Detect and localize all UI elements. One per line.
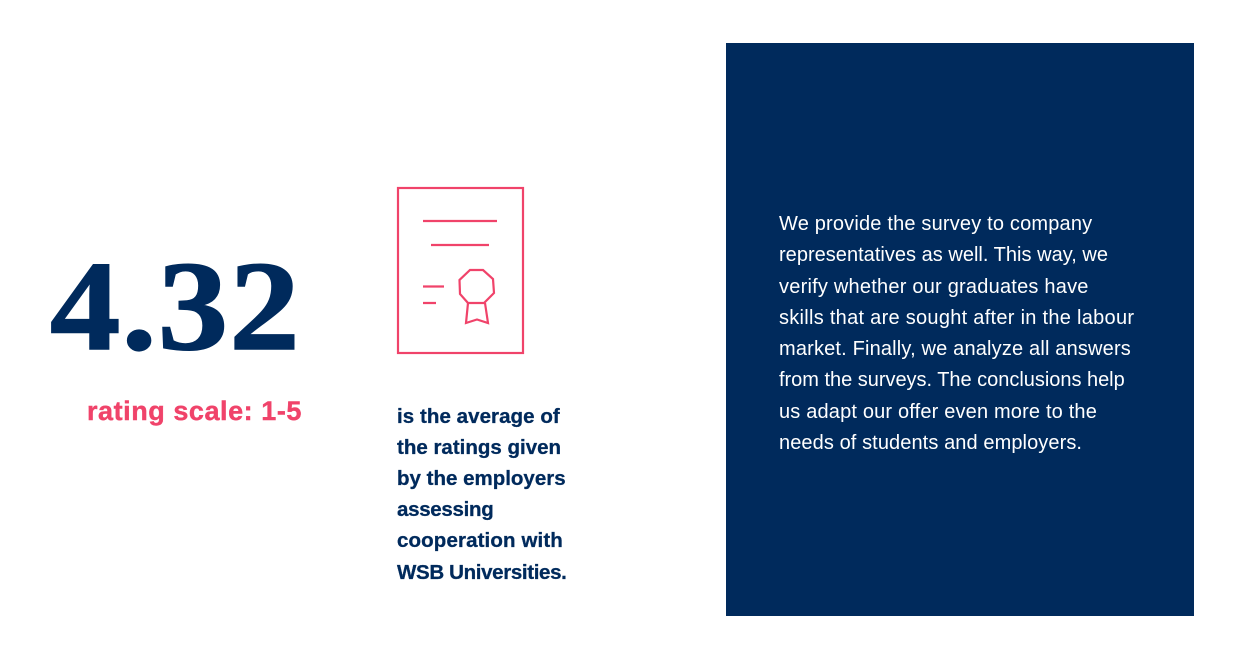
panel: survey explanation: [726, 43, 1194, 616]
panel body text: us adapt our offer even more to the: [779, 401, 1097, 423]
panel body text: representatives as well. This way, we: [779, 244, 1108, 266]
description text: cooperation with: [397, 529, 563, 552]
description text: the ratings given: [397, 436, 561, 459]
description text: [396, 404, 566, 584]
description text: WSB Universities.: [397, 561, 566, 584]
panel body text: from the surveys. The conclusions help: [779, 369, 1125, 391]
description text: assessing: [397, 498, 493, 521]
panel body text: We provide the survey to company: [779, 213, 1092, 235]
panel body text: [779, 213, 1134, 454]
panel body text: skills that are sought after in the labour: [779, 307, 1134, 329]
icon: certificate: [396, 186, 524, 354]
panel body text: market. Finally, we analyze all answers: [779, 338, 1131, 360]
description text: by the employers: [397, 467, 566, 490]
panel body text: verify whether our graduates have: [779, 276, 1089, 298]
panel body text: needs of students and employers.: [779, 432, 1082, 454]
big number: 4.32: [50, 235, 301, 377]
description text: is the average of: [397, 404, 560, 428]
rating scale label: rating scale: 1-5: [87, 396, 302, 426]
